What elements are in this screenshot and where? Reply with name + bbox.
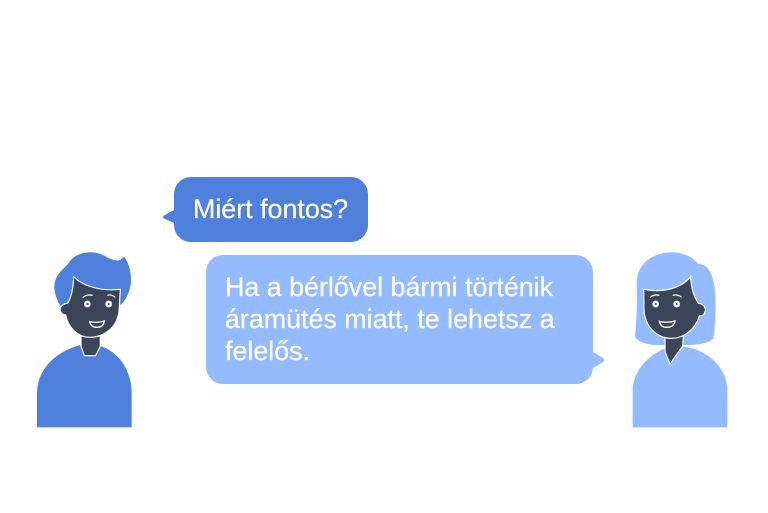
man mouth xyxy=(90,321,104,327)
woman body xyxy=(633,347,727,427)
speech bubble: question xyxy=(163,177,368,242)
question text: Miért fontos? xyxy=(193,194,348,224)
man hair xyxy=(54,252,131,308)
answer text: felelős. xyxy=(225,336,310,366)
man eyes xyxy=(84,301,112,307)
man eyebrows xyxy=(83,295,115,298)
answer text xyxy=(225,272,555,366)
woman mouth xyxy=(659,321,675,327)
woman face xyxy=(644,277,705,338)
woman hair xyxy=(635,252,716,345)
woman eyebrows xyxy=(650,295,682,298)
woman neck xyxy=(665,336,683,364)
speech bubble: answer xyxy=(206,255,604,384)
character: woman xyxy=(633,252,727,427)
man neck xyxy=(81,336,100,356)
man body xyxy=(37,345,132,427)
answer text: Ha a bérlővel bármi történik xyxy=(225,272,553,302)
character: man xyxy=(37,252,132,427)
answer text: áramütés miatt, te lehetsz a xyxy=(225,304,555,334)
man face xyxy=(60,277,120,337)
woman eyes xyxy=(652,301,680,307)
